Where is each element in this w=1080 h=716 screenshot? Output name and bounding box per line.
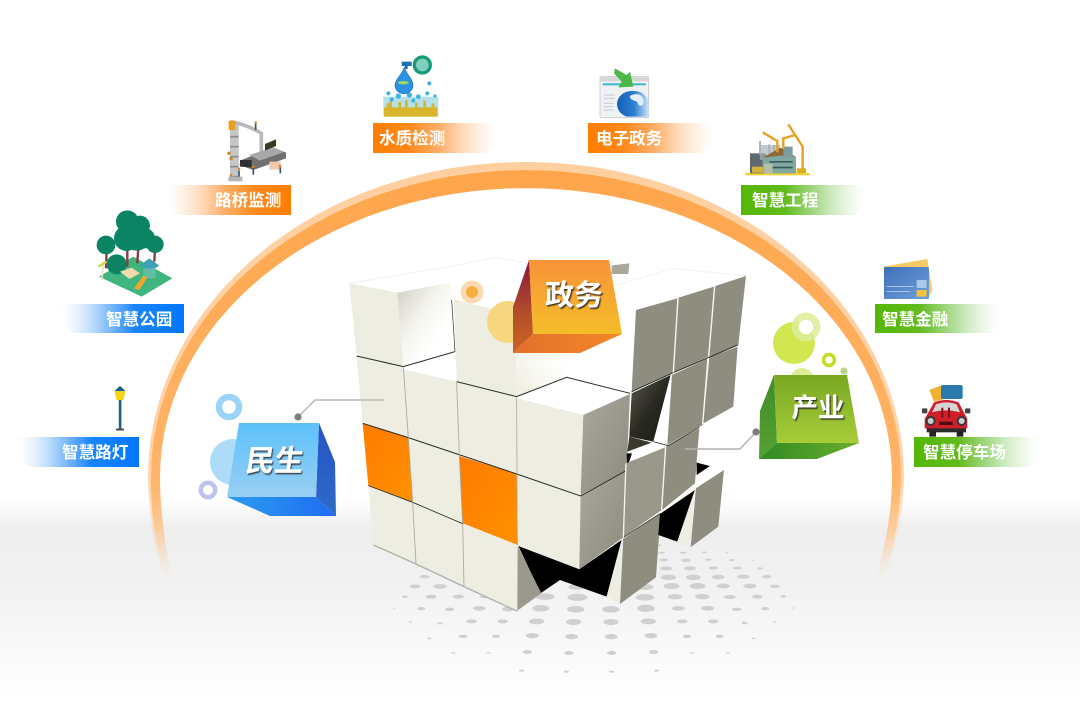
label: 智慧金融: [875, 304, 1002, 333]
产业 connector line: [685, 428, 760, 449]
3D box: 政务: [513, 260, 622, 353]
icon: e-government: [600, 68, 649, 118]
icon: street lamp: [114, 386, 126, 430]
民生 connector line: [294, 400, 384, 421]
label: 智慧公园: 智慧公园: [106, 309, 172, 329]
3D box: 产业: [759, 375, 859, 459]
label: 路桥监测: 路桥监测: [215, 191, 281, 210]
label: 智慧路灯: 智慧路灯: [62, 442, 129, 462]
label: 智慧停车场: 智慧停车场: [923, 442, 1006, 462]
label: 水质检测: 水质检测: [379, 128, 445, 148]
label: 智慧金融: 智慧金融: [882, 309, 949, 329]
3D box: 民生: 民生: [243, 445, 306, 478]
label: 水质检测: [373, 123, 497, 153]
cube left face cells: [349, 283, 583, 611]
3D box: 政务: 政务: [545, 279, 603, 312]
cube right face cells: [517, 276, 746, 611]
label: 路桥监测: [167, 185, 291, 215]
icon: park: [97, 210, 172, 297]
label: 智慧工程: [741, 185, 867, 215]
3D box: 民生: [227, 423, 336, 516]
label: 智慧停车场: [914, 437, 1040, 467]
icon: construction: [745, 124, 810, 175]
3D box: 产业: 产业: [792, 393, 844, 423]
label: 智慧公园: [60, 304, 184, 333]
background floor gradient: [0, 500, 1080, 700]
orange arc: [148, 162, 904, 585]
icon: bank cards: [883, 259, 932, 299]
label: 电子政务: [588, 123, 713, 153]
callout: 政务 decorations: [460, 280, 529, 343]
label: 智慧工程: 智慧工程: [752, 190, 819, 210]
rubik cube: [349, 257, 746, 611]
icon: bridge monitoring: [227, 121, 286, 181]
icon: parking car: [922, 385, 970, 437]
产业 decorative circles: [773, 312, 848, 392]
floor halftone dots: [393, 545, 794, 673]
label: 电子政务: 电子政务: [596, 129, 663, 148]
民生 decorative circles: [201, 397, 256, 497]
icon: water quality: [383, 55, 438, 117]
label: 智慧路灯: [17, 437, 139, 467]
